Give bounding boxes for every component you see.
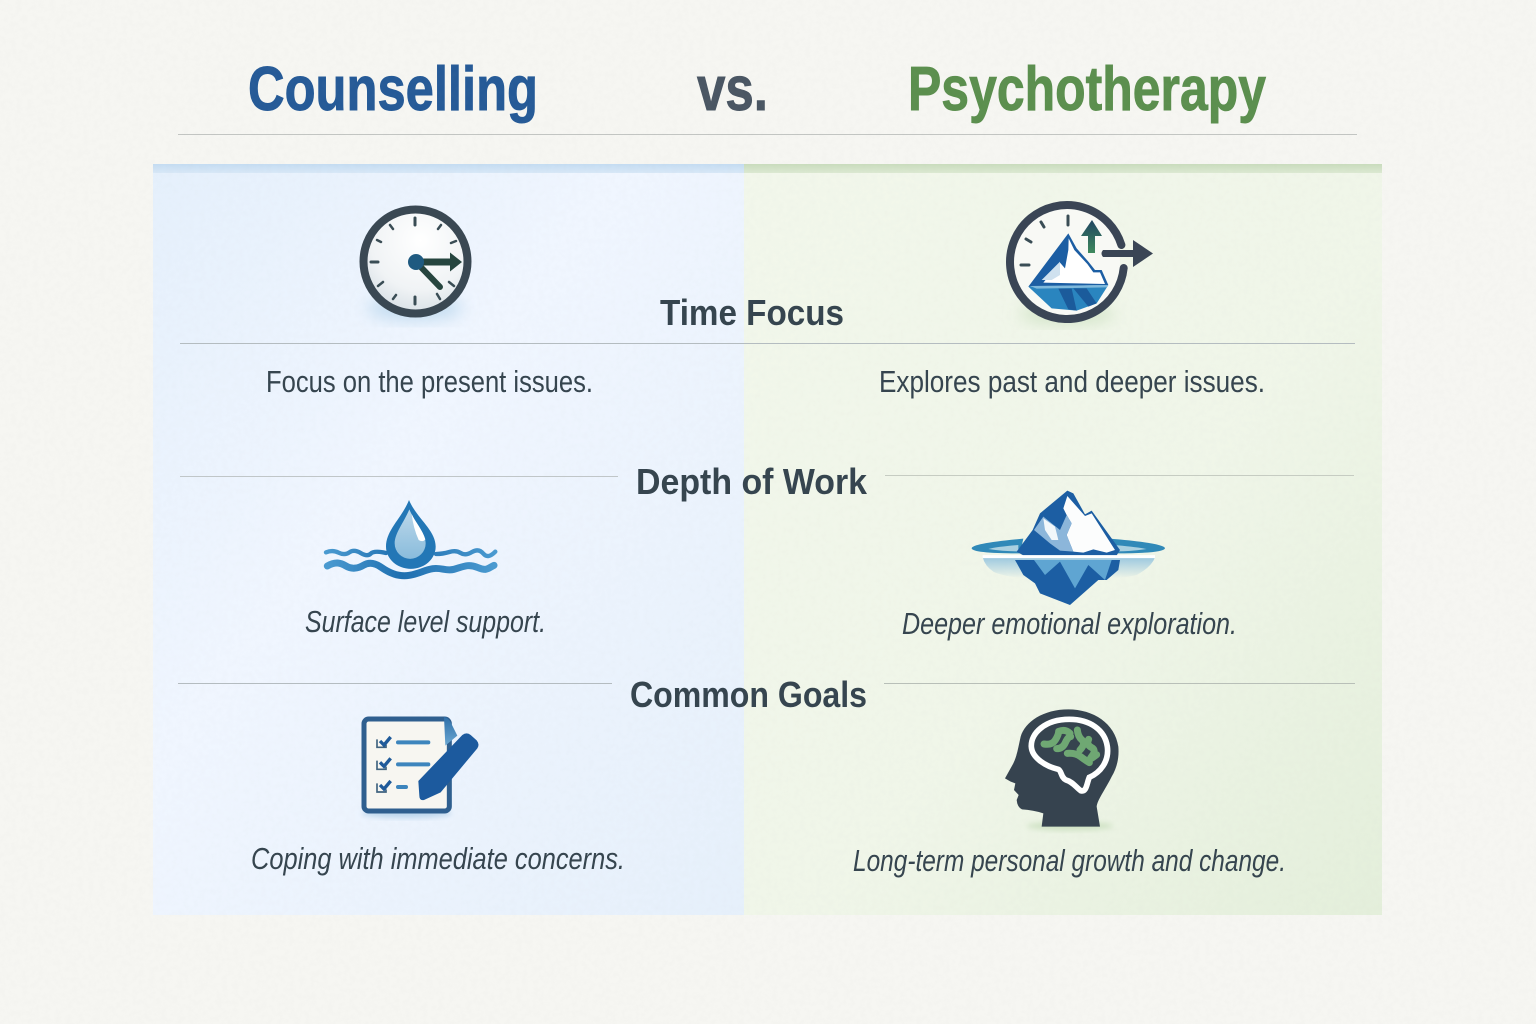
upper waves [326, 550, 495, 556]
text: focus on present: Focus on the present issues. [266, 364, 593, 399]
board [364, 719, 449, 811]
brain outline [1031, 719, 1108, 791]
heading: vs.: vs. [697, 55, 768, 124]
iceberg above water [1028, 233, 1108, 287]
row heading: Common Goals: Common Goals [630, 674, 867, 715]
drop [386, 500, 436, 569]
title [248, 55, 1266, 124]
page fold [444, 717, 457, 746]
icon: head with brain [1005, 709, 1119, 831]
text: surface level: Surface level support. [305, 604, 546, 639]
green up arrow [1081, 220, 1102, 253]
text: long-term: Long-term personal growth and change. [853, 843, 1286, 878]
head silhouette [1005, 709, 1119, 827]
icon: water drop on waves [326, 500, 495, 576]
icon: checklist and pencil [362, 717, 479, 818]
row heading: Depth of Work: Depth of Work [636, 461, 868, 502]
water ring [972, 539, 1165, 553]
right arrow [1102, 240, 1153, 267]
brain lobes [1044, 730, 1097, 763]
lower wave [327, 563, 494, 576]
berg above water [1017, 491, 1120, 555]
icon: clock [364, 210, 468, 320]
panel: counselling column [153, 164, 744, 915]
waterline [983, 552, 1155, 561]
pencil [418, 733, 479, 800]
water bowl [983, 557, 1155, 578]
icon: iceberg [972, 491, 1165, 605]
heading: Psychotherapy: Psychotherapy [908, 55, 1266, 124]
iceberg below water [1028, 285, 1108, 311]
heading: Counselling: Counselling [248, 55, 538, 124]
text: coping: Coping with immediate concerns. [251, 841, 625, 876]
berg below water [1015, 560, 1120, 605]
text: explores past: Explores past and deeper issues. [879, 364, 1265, 399]
row heading: Time Focus: Time Focus [660, 292, 844, 333]
panel: psychotherapy column [744, 164, 1382, 915]
checkboxes [377, 737, 391, 792]
text: deeper emotional: Deeper emotional exploration. [902, 606, 1237, 641]
icon: clock with iceberg [1010, 205, 1153, 324]
list lines [398, 742, 428, 787]
